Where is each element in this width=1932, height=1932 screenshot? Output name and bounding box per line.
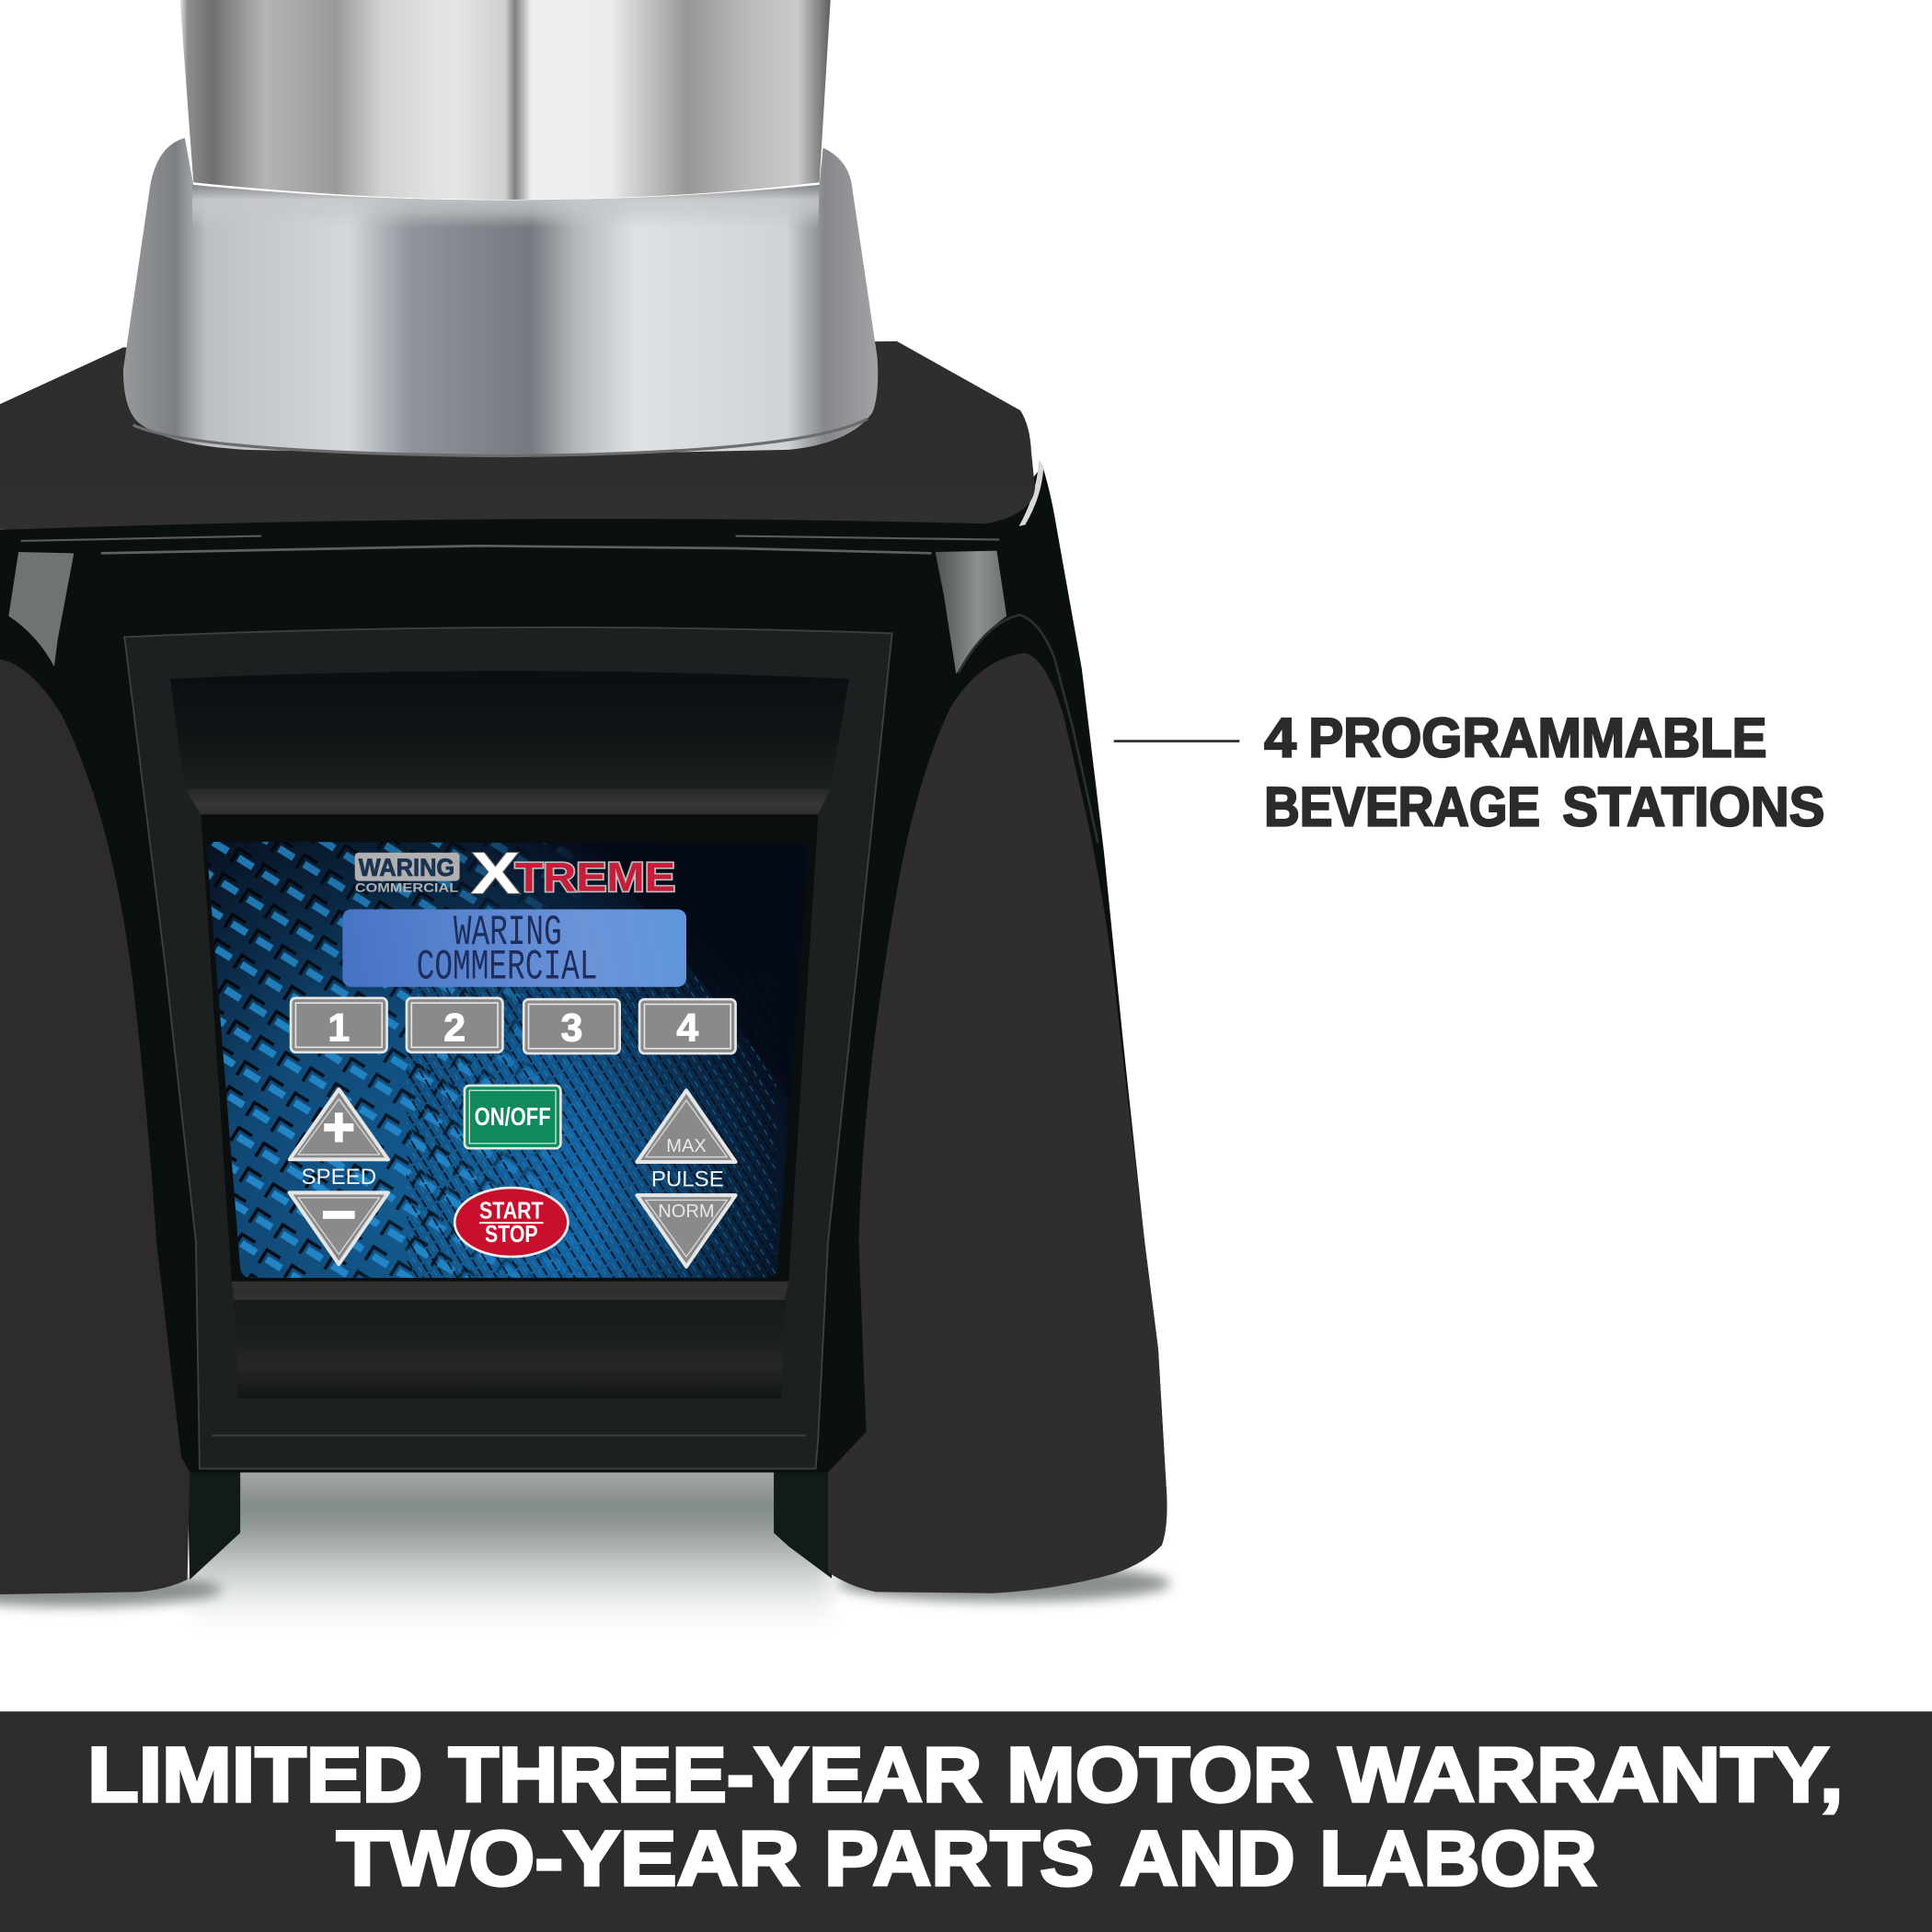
speed down button — [290, 1192, 388, 1264]
brand logo: X — [471, 840, 520, 906]
start/stop button: START — [479, 1199, 544, 1225]
station button 3: 3 — [561, 1006, 582, 1051]
right foot panel — [774, 653, 1167, 1593]
banner text: TWO-YEAR — [337, 1815, 799, 1902]
on/off button — [465, 1086, 560, 1148]
callout text — [1264, 706, 1824, 837]
banner text: THREE-YEAR — [448, 1731, 982, 1818]
warranty banner — [0, 1711, 1932, 1932]
banner text: LABOR — [1319, 1815, 1597, 1902]
callout text: 4 — [1264, 706, 1296, 768]
banner text: AND — [1120, 1815, 1295, 1902]
pulse norm button — [637, 1195, 736, 1267]
station button 4: 4 — [676, 1006, 698, 1051]
brand logo: COMMERCIAL — [355, 881, 458, 895]
speed up button — [290, 1089, 388, 1159]
banner text: PARTS — [824, 1815, 1094, 1902]
LCD screen — [342, 909, 686, 992]
callout connector line — [1114, 740, 1239, 742]
callout text: BEVERAGE — [1264, 775, 1540, 837]
callout text: PROGRAMMABLE — [1308, 706, 1767, 768]
brand logo — [355, 840, 675, 906]
start/stop button: STOP — [485, 1222, 538, 1248]
pulse max button — [637, 1090, 736, 1162]
floor shadow under blender — [0, 1454, 1170, 1639]
speed label: SPEED — [301, 1165, 376, 1190]
station button 1 — [291, 998, 387, 1052]
brand logo: TREME — [515, 855, 675, 900]
banner text: MOTOR — [1006, 1731, 1312, 1818]
banner text — [87, 1731, 1844, 1902]
base lid — [0, 341, 1035, 530]
control housing frame — [124, 627, 892, 1468]
display panel — [203, 840, 813, 1282]
left foot panel — [0, 660, 240, 1594]
station button 3 — [523, 999, 620, 1053]
glossy corner highlights — [8, 460, 1098, 843]
station button 2 — [407, 998, 502, 1052]
brand logo: WARING — [359, 854, 454, 881]
on/off button: ON/OFF — [475, 1102, 551, 1131]
blender body — [0, 466, 1167, 1565]
panel texture — [203, 842, 813, 1282]
callout text: STATIONS — [1562, 775, 1824, 837]
station button 4 — [639, 999, 736, 1053]
station button 1: 1 — [328, 1006, 350, 1051]
LCD screen: COMMERCIAL — [417, 945, 598, 992]
start/stop button — [454, 1188, 568, 1257]
banner background — [0, 1711, 1932, 1932]
pulse norm button: NORM — [658, 1202, 715, 1222]
banner text: LIMITED — [87, 1731, 422, 1818]
pulse max button: MAX — [666, 1136, 707, 1156]
banner text: WARRANTY, — [1338, 1731, 1844, 1818]
blender product illustration — [0, 0, 1170, 1639]
stainless jar — [180, 0, 831, 200]
station button 2: 2 — [443, 1006, 466, 1051]
pulse label: PULSE — [651, 1167, 724, 1192]
LCD screen: WARING — [454, 910, 562, 958]
jar collar — [123, 138, 878, 456]
panel background — [207, 842, 809, 1278]
